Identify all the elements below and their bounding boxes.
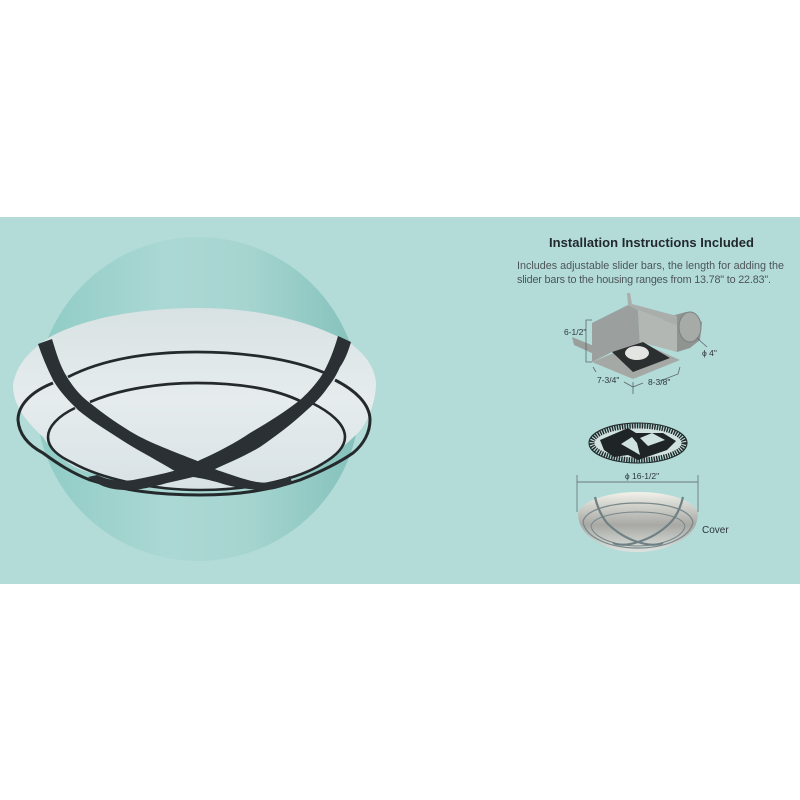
teal panel background xyxy=(0,217,800,584)
mounting bracket xyxy=(627,293,677,325)
dimension labels: 8-3/8" xyxy=(648,377,670,387)
housing right face xyxy=(638,310,677,352)
housing diagram xyxy=(564,293,717,394)
crossing frame band, left xyxy=(38,339,292,490)
teal circle behind the fixture xyxy=(36,237,360,561)
housing base xyxy=(612,342,670,372)
housing tray xyxy=(592,342,680,379)
housing left face xyxy=(592,305,640,362)
dimension bracket, 16-1/2 inch: ϕ 16-1/2" xyxy=(625,471,659,481)
heading: Installation Instructions Included xyxy=(549,235,754,250)
ceiling light fixture xyxy=(13,308,376,495)
slotted ring xyxy=(592,426,684,460)
ring outer edge xyxy=(589,423,687,463)
dimension bracket, 16-1/2 inch xyxy=(577,471,698,512)
black bracket xyxy=(600,428,676,460)
left slider tab xyxy=(572,337,594,354)
lower outer ring xyxy=(18,380,370,495)
upper ring xyxy=(68,352,325,377)
small cover illustration xyxy=(578,492,698,552)
description text: Includes adjustable slider bars, the length for adding the xyxy=(517,260,784,272)
dimension lines xyxy=(586,320,707,394)
dimension labels: 6-1/2" xyxy=(564,327,586,337)
dimension labels: 7-3/4" xyxy=(597,375,619,385)
duct connector xyxy=(664,312,702,352)
description text: slider bars to the housing ranges from 13.78" to 22.83". xyxy=(517,274,771,286)
crossing frame band, right xyxy=(88,336,351,490)
cover label: Cover xyxy=(702,525,729,536)
middle ring xyxy=(90,383,302,402)
duct opening xyxy=(679,312,701,342)
dimension labels xyxy=(564,327,717,387)
bracket cutouts xyxy=(621,433,665,455)
description text xyxy=(517,260,784,286)
dimension labels: ϕ 4" xyxy=(702,348,717,358)
white glass dish xyxy=(13,308,376,490)
plate interior xyxy=(592,427,684,459)
lower inner ring xyxy=(48,403,345,490)
mounting plate diagram xyxy=(589,423,687,463)
fan xyxy=(625,346,649,360)
